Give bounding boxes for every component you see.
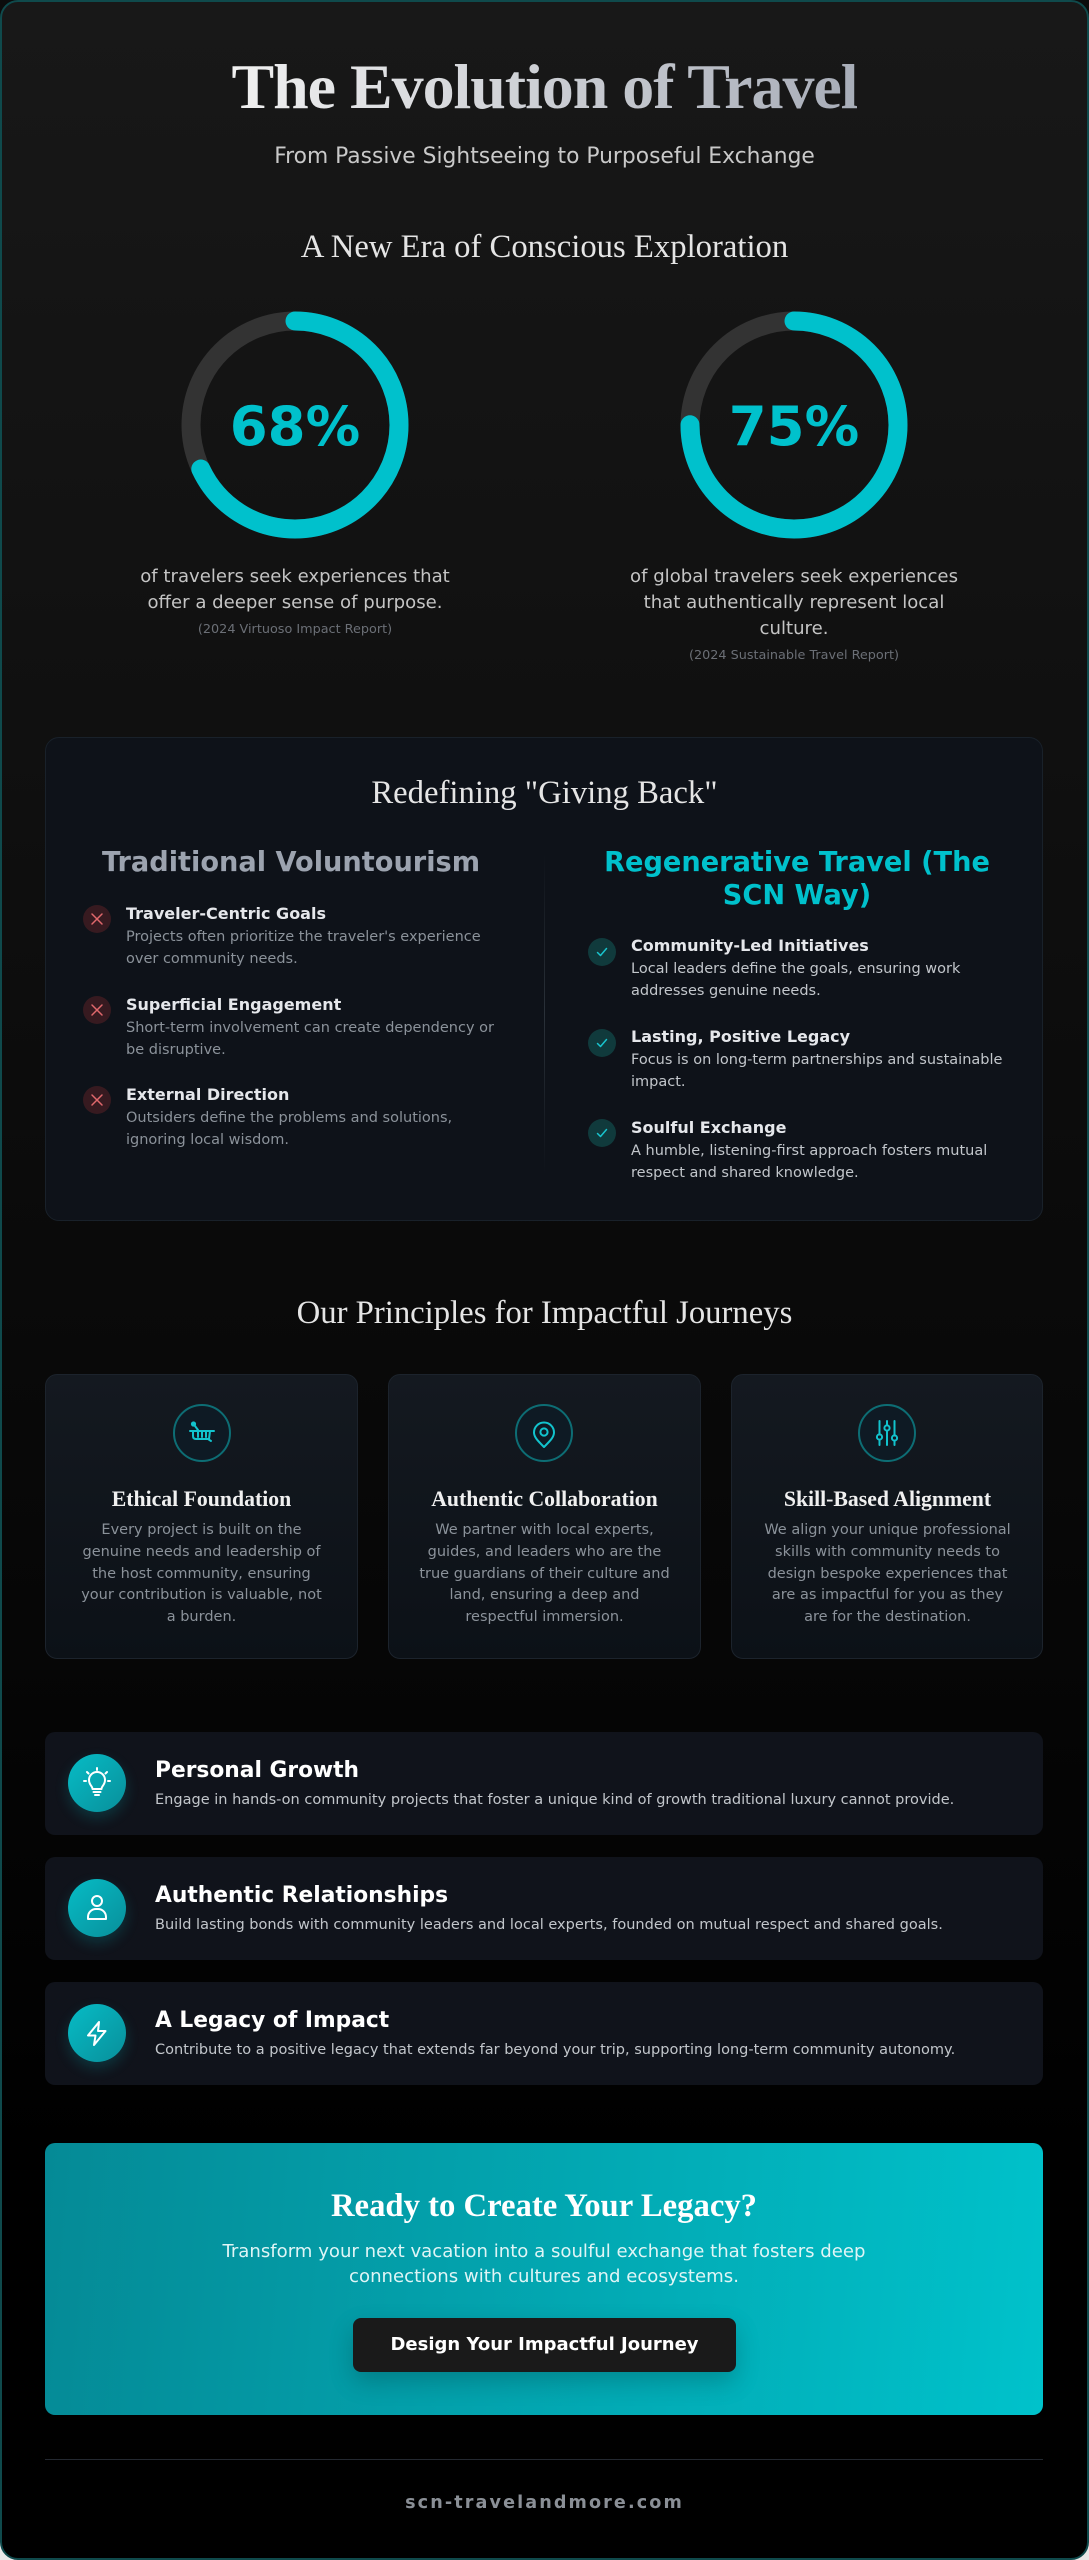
benefit title: A Legacy of Impact [155, 2008, 389, 2033]
card description: a burden. [167, 1609, 236, 1625]
card description: We align your unique professional [764, 1522, 1011, 1538]
heading: a new era: A New Era of Conscious Exploration [301, 229, 788, 265]
card description: design bespoke experiences that [768, 1566, 1007, 1582]
item description: ignoring local wisdom. [126, 1132, 289, 1148]
icon: check [588, 1029, 616, 1057]
card description: genuine needs and leadership of [82, 1544, 321, 1560]
item description: addresses genuine needs. [631, 983, 821, 999]
caption 75: culture. [760, 618, 828, 639]
icon: x [83, 1086, 111, 1114]
column heading: traditional voluntourism: Traditional Voluntourism [102, 847, 480, 878]
list: regenerative items [588, 936, 1002, 1181]
card description: skills with community needs to [775, 1544, 1000, 1560]
item description: Outsiders define the problems and solutions, [126, 1110, 452, 1126]
ring chart 68 [182, 312, 408, 538]
card description: land, ensuring a deep and [449, 1587, 640, 1603]
card description [419, 1522, 670, 1625]
cta description: Transform your next vacation into a soulful exchange that fosters deep [222, 2241, 866, 2262]
caption 75: that authentically represent local [644, 592, 944, 613]
item title: Community-Led Initiatives [631, 936, 869, 955]
item title: Soulful Exchange [631, 1118, 786, 1137]
footer rule [45, 2459, 1043, 2460]
caption 75 [630, 566, 958, 639]
number 68: 68% [230, 394, 360, 458]
cta button [353, 2318, 736, 2372]
item description [631, 961, 960, 999]
source 68: (2024 Virtuoso Impact Report) [198, 622, 392, 637]
item description: respect and shared knowledge. [631, 1165, 859, 1181]
icon: x [83, 996, 111, 1024]
item title: External Direction [126, 1085, 289, 1104]
caption 68 [140, 566, 450, 613]
icon: check [588, 1119, 616, 1147]
item description [126, 1110, 452, 1148]
icon: location pin [515, 1404, 573, 1462]
card: skill-based alignment [731, 1374, 1043, 1659]
benefit: legacy of impact [45, 1982, 1043, 2085]
panel: call to action [45, 2143, 1043, 2415]
benefit title: Personal Growth [155, 1758, 359, 1783]
stat: 75 percent [630, 312, 958, 663]
subtitle: From Passive Sightseeing to Purposeful Exchange [274, 144, 815, 169]
icon: person [68, 1879, 126, 1937]
card description: Every project is built on the [101, 1522, 302, 1538]
item description: Short-term involvement can create dependency or [126, 1020, 494, 1036]
card description: the host community, ensuring [92, 1566, 311, 1582]
item description: be disruptive. [126, 1042, 226, 1058]
item description: over community needs. [126, 951, 298, 967]
icon: light bulb [68, 1754, 126, 1812]
caption 75: of global travelers seek experiences [630, 566, 958, 587]
item description: impact. [631, 1074, 686, 1090]
item description [126, 929, 481, 967]
card title: Authentic Collaboration [431, 1487, 658, 1511]
column heading: regenerative travel: Regenerative Travel (The [604, 847, 990, 878]
divider [544, 853, 545, 1175]
benefit: authentic relationships [45, 1857, 1043, 1960]
stat: 68 percent [140, 312, 450, 637]
card: authentic collaboration [388, 1374, 701, 1659]
card description: guides, and leaders who are the [428, 1544, 661, 1560]
item description: Local leaders define the goals, ensuring work [631, 961, 960, 977]
number 75: 75% [729, 394, 859, 458]
card: ethical foundation [45, 1374, 358, 1659]
benefit: personal growth [45, 1732, 1043, 1835]
ring chart 75 [680, 312, 908, 538]
column heading: regenerative travel: SCN Way) [723, 880, 871, 911]
cta button: Design Your Impactful Journey [390, 2334, 699, 2355]
card description: are for the destination. [804, 1609, 971, 1625]
caption 68: of travelers seek experiences that [140, 566, 450, 587]
item title: Lasting, Positive Legacy [631, 1027, 850, 1046]
cta description: connections with cultures and ecosystems. [349, 2266, 739, 2287]
item title: Traveler-Centric Goals [126, 904, 326, 923]
title: The Evolution of Travel [232, 51, 857, 122]
caption 68: offer a deeper sense of purpose. [147, 592, 443, 613]
icon: check [588, 938, 616, 966]
item description: Focus is on long-term partnerships and sustainable [631, 1052, 1002, 1068]
item description: Projects often prioritize the traveler's experience [126, 929, 481, 945]
item description: A humble, listening-first approach fosters mutual [631, 1143, 987, 1159]
footer url: scn-travelandmore.com [405, 2493, 684, 2513]
benefit description: Contribute to a positive legacy that extends far beyond your trip, supporting long-term community autonomy. [155, 2042, 955, 2058]
card description: are as impactful for you as they [772, 1587, 1003, 1603]
benefit title: Authentic Relationships [155, 1883, 448, 1908]
card description: your contribution is valuable, not [81, 1587, 322, 1603]
card description: respectful immersion. [465, 1609, 624, 1625]
item description [631, 1143, 987, 1181]
icon: lightning [68, 2004, 126, 2062]
column heading: regenerative travel [604, 847, 990, 911]
card description: true guardians of their culture and [419, 1566, 670, 1582]
item title: Superficial Engagement [126, 995, 341, 1014]
heading: principles: Our Principles for Impactful Journeys [297, 1295, 792, 1331]
icon: ethical foundation [173, 1404, 231, 1462]
source 75: (2024 Sustainable Travel Report) [689, 648, 899, 663]
heading: redefining giving back: Redefining "Giving Back" [371, 775, 718, 811]
icon: x [83, 905, 111, 933]
card title: Ethical Foundation [112, 1487, 291, 1511]
icon: sliders [858, 1404, 916, 1462]
cta heading: Ready to Create Your Legacy? [331, 2188, 757, 2224]
benefit description: Build lasting bonds with community leaders and local experts, founded on mutual respect and shared goals. [155, 1917, 943, 1933]
card description [81, 1522, 322, 1625]
item description [126, 1020, 494, 1058]
list: traditional items [83, 904, 494, 1148]
card title: Skill-Based Alignment [784, 1487, 991, 1511]
item description [631, 1052, 1002, 1090]
cta description [222, 2241, 866, 2287]
card description [764, 1522, 1011, 1625]
card description: We partner with local experts, [435, 1522, 654, 1538]
panel: redefining giving back [45, 737, 1043, 1221]
benefit description: Engage in hands-on community projects that foster a unique kind of growth traditional luxury cannot provide. [155, 1792, 954, 1808]
